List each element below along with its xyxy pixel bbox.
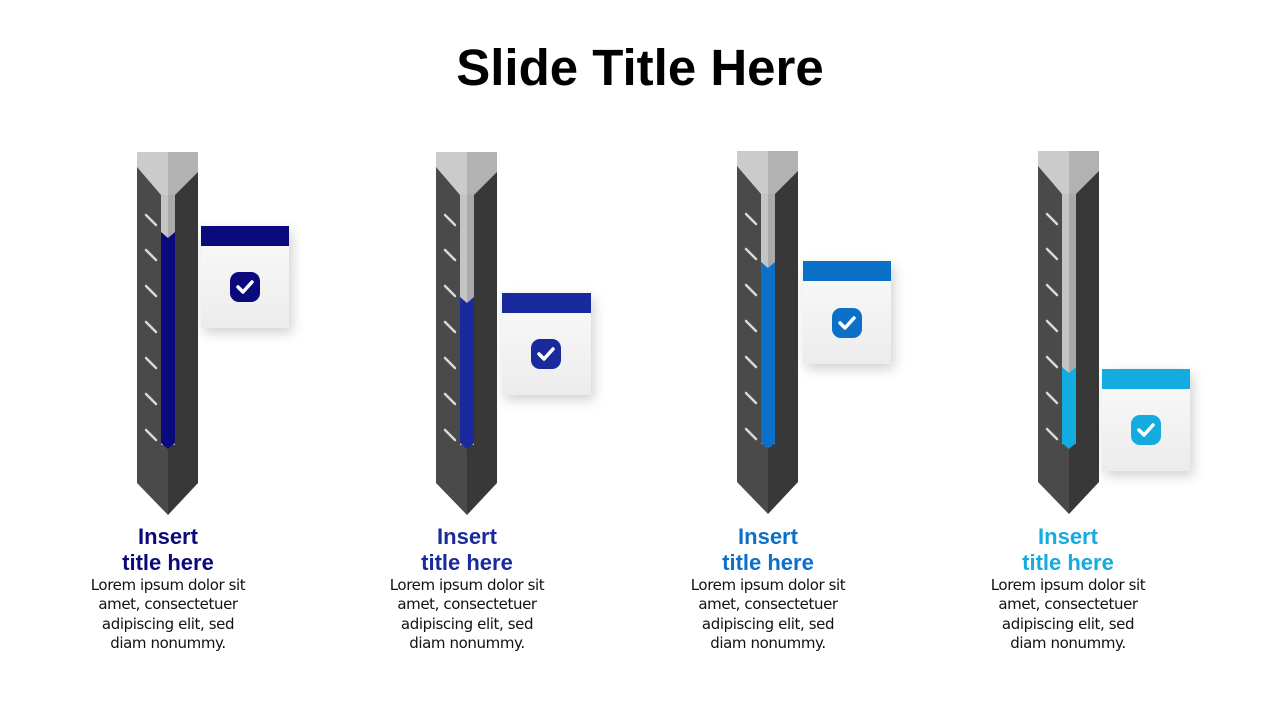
text block 3: Lorem ipsum dolor sit [691,576,845,594]
text block 2: adipiscing elit, sed [401,615,533,633]
text block 2 [390,524,544,652]
text block 4 [991,524,1146,652]
text block 2: Lorem ipsum dolor sit [390,576,544,594]
text block 4: adipiscing elit, sed [1002,615,1134,633]
gauge 3 [737,151,798,514]
text block 2: title here [421,550,513,575]
text block 1: Lorem ipsum dolor sit [91,576,245,594]
text block 2: diam nonummy. [409,634,525,652]
gauge 1 [137,152,198,515]
gauge 4 [1038,151,1099,514]
text block 1: adipiscing elit, sed [102,615,234,633]
text block 3: title here [722,550,814,575]
card 4 [1102,369,1190,471]
text block 4: title here [1022,550,1114,575]
text block 1: Insert [138,524,198,549]
text block 3: amet, consectetuer [698,595,838,613]
card 2 [502,293,591,395]
text block 1: title here [122,550,214,575]
text block 1: amet, consectetuer [98,595,238,613]
text block 2: Insert [437,524,497,549]
text block 1 [91,524,246,652]
text block 3: diam nonummy. [710,634,826,652]
text block 3 [691,524,846,652]
text block 3: Insert [738,524,798,549]
text block 4: Lorem ipsum dolor sit [991,576,1145,594]
card 3 [803,261,891,364]
text block 2: amet, consectetuer [397,595,537,613]
text block 4: Insert [1038,524,1098,549]
text block 4: amet, consectetuer [998,595,1138,613]
card 1 [201,226,289,328]
text block 3: adipiscing elit, sed [702,615,834,633]
gauge 2 [436,152,497,515]
title: Slide Title Here [456,39,824,96]
text block 4: diam nonummy. [1010,634,1126,652]
text block 1: diam nonummy. [110,634,226,652]
